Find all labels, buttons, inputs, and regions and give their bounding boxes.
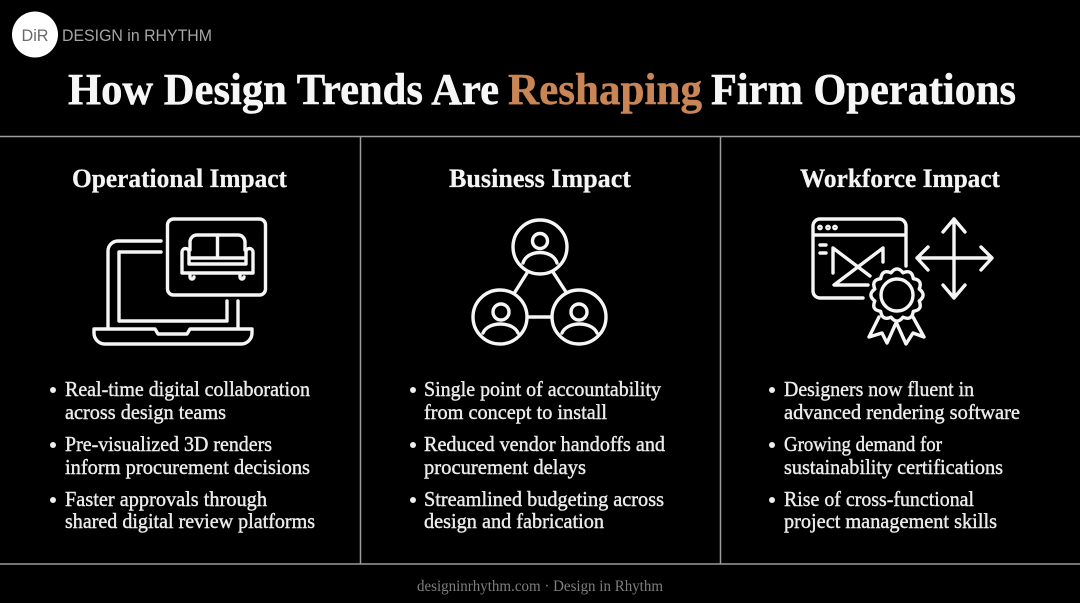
bullet list: workforce impact: Rise of cross-functional: [784, 487, 974, 511]
bullet list: business impact: procurement delays: [424, 455, 586, 479]
bullet list: operational impact: shared digital review platforms: [65, 509, 315, 533]
bullet list: operational impact: Faster approvals through: [65, 487, 267, 511]
bullet list: workforce impact: [769, 377, 1020, 533]
heading: workforce impact: Workforce Impact: [800, 164, 1000, 193]
bullet list: operational impact: inform procurement decisions: [65, 455, 310, 479]
bullet list: workforce impact: sustainability certifications: [784, 455, 1003, 479]
bullet list: business impact: Streamlined budgeting across: [424, 487, 664, 511]
logo: [12, 12, 212, 58]
bullet list: business impact: [410, 377, 665, 533]
bullet list: business impact: Single point of accountability: [424, 377, 661, 401]
bullet list: operational impact: [50, 377, 315, 533]
bullet list: business impact: design and fabrication: [424, 509, 604, 533]
panel: workforce impact: [769, 164, 1020, 533]
bullet list: operational impact: across design teams: [65, 400, 226, 424]
icon: connected people network: [473, 220, 606, 344]
bullet list: business impact: Reduced vendor handoffs and: [424, 432, 665, 456]
bullet list: workforce impact: advanced rendering software: [784, 400, 1020, 424]
logo: DESIGN in RHYTHM: [62, 26, 212, 45]
bullet list: workforce impact: project management skills: [784, 509, 997, 533]
logo: DiR: [22, 26, 48, 45]
heading: operational impact: Operational Impact: [72, 164, 287, 193]
title: How Design Trends Are: [68, 65, 499, 114]
icon: laptop with sofa card: [94, 219, 266, 344]
title: [68, 65, 1016, 114]
bullet list: workforce impact: Growing demand for: [784, 432, 942, 456]
title: Reshaping: [508, 65, 702, 114]
panel: operational impact: [50, 164, 315, 533]
bullet list: operational impact: Real-time digital collaboration: [65, 377, 310, 401]
panel: business impact: [410, 164, 665, 533]
bullet list: operational impact: Pre-visualized 3D renders: [65, 432, 272, 456]
icon: window, certificate badge and arrows: [813, 219, 992, 344]
heading: business impact: Business Impact: [449, 164, 631, 193]
bullet list: workforce impact: Designers now fluent in: [784, 377, 974, 401]
title: Firm Operations: [711, 65, 1016, 114]
bullet list: business impact: from concept to install: [424, 400, 607, 424]
footer: designinrhythm.com · Design in Rhythm: [417, 578, 664, 595]
